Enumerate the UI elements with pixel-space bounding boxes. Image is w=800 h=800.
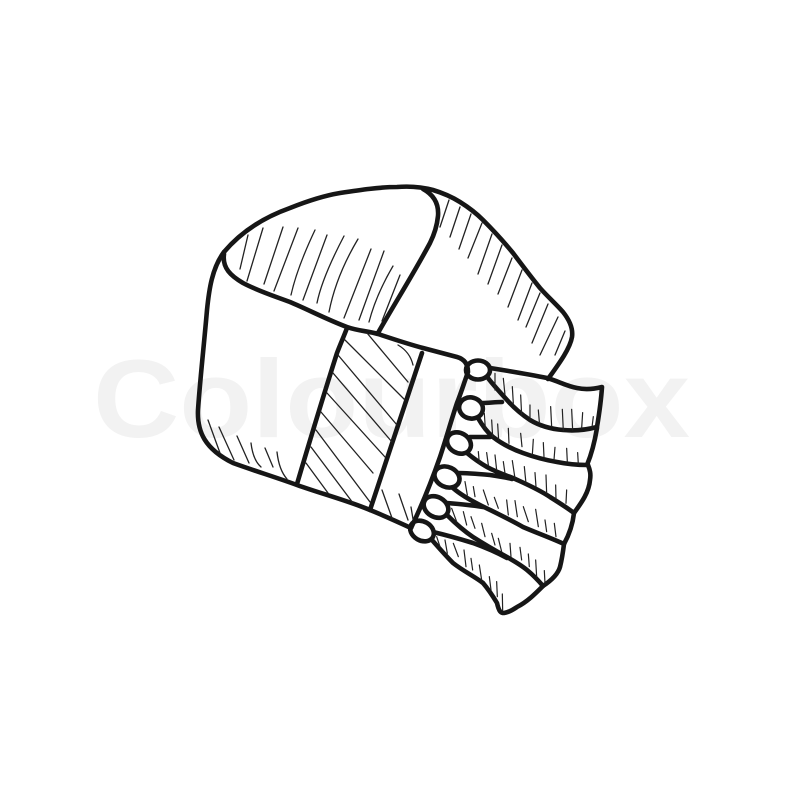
watermark text: Colourbox — [93, 338, 690, 461]
hatching: fringe tassels — [437, 373, 593, 610]
hatching: stripe band — [306, 333, 413, 503]
hatching: scarf inner fold — [240, 227, 400, 322]
fringe tassel outlines — [432, 368, 602, 613]
scarf outline — [198, 187, 602, 613]
stripe band edges — [297, 328, 422, 510]
hatching: scarf lower edge — [208, 420, 413, 520]
scarf body outline — [198, 187, 572, 528]
fringe knots — [406, 360, 490, 545]
hatching: scarf back panel — [440, 200, 565, 355]
